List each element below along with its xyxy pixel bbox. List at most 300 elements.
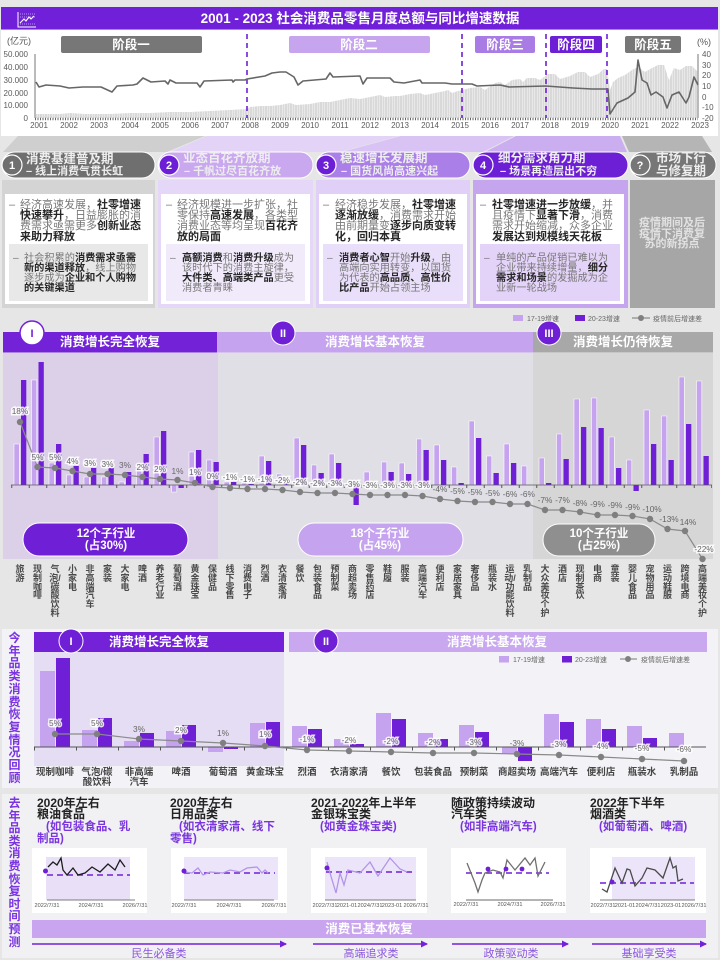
side heading: last year's forecast: 费: [8, 859, 20, 873]
year labels: 2007: [211, 121, 229, 130]
data labels: growth difference: -8%: [573, 498, 588, 508]
left axis labels: [4, 50, 29, 123]
pill: 12 sub-industries: 12个子行业: [77, 526, 135, 540]
vertical category labels: 婴: [628, 564, 637, 574]
vertical category labels: 众: [540, 573, 550, 583]
arrows and category labels: 政策驱动类: [484, 946, 538, 960]
category labels: 衣清家清: [330, 766, 368, 778]
data labels: growth difference: -22%: [694, 544, 714, 554]
stage 2 text card: 消费业态等均呈现百花齐: [177, 218, 298, 232]
right axis unit: (%): [697, 37, 711, 47]
data labels: growth difference: -3%: [398, 480, 413, 490]
stage 3 text card: 高端向实用转变，以国货: [339, 261, 451, 274]
vertical category labels: 餐: [295, 564, 304, 574]
right axis labels: -10: [702, 103, 714, 112]
side heading: last year's forecast: 测: [8, 935, 20, 949]
mini chart 5: 2026/7/31: [682, 903, 706, 909]
stage 1 text card: [5, 194, 153, 304]
stage 1 text card: –: [13, 253, 19, 264]
data labels: growth difference: 0%: [206, 471, 219, 481]
vertical category labels: 动: [663, 573, 672, 583]
vertical category labels: 场: [348, 590, 357, 600]
category labels: 烈酒: [297, 766, 317, 778]
data labels: -3%: [552, 739, 567, 749]
side heading: this year's review: 回: [8, 758, 20, 772]
vertical category labels: 家: [278, 582, 287, 592]
vertical category labels: 黄: [190, 564, 200, 574]
vertical category labels: 酸: [50, 590, 60, 600]
stage 4 pill: 4: [480, 160, 487, 172]
vertical category labels: 品: [645, 590, 654, 600]
stage badges: 阶段二: [340, 37, 378, 52]
data labels: -3%: [510, 738, 525, 748]
vertical category labels: 行: [155, 582, 164, 592]
data labels: 3%: [133, 724, 146, 734]
data labels: -2%: [426, 737, 441, 747]
side heading: this year's review: 年: [8, 644, 20, 658]
vertical category labels: 车: [85, 599, 94, 609]
vertical category labels: 清: [278, 573, 287, 583]
vertical category labels: 护: [540, 608, 550, 618]
section header III: [533, 321, 713, 352]
data labels: growth difference: 4%: [66, 456, 79, 466]
left axis labels: 10.000: [4, 101, 29, 110]
stage 3 text card: 比产品开始占领主场: [339, 281, 431, 294]
vertical category labels: 料: [50, 608, 60, 618]
vertical category labels: 商: [593, 573, 602, 583]
data labels: growth difference: 14%: [680, 517, 697, 527]
category labels: 汽车: [129, 776, 149, 788]
side heading: last year's forecast: 预: [8, 922, 20, 936]
year labels: 2022: [661, 121, 679, 130]
stage 3 pill: 3: [323, 160, 329, 172]
stage 2 text card: 经济规模进一步扩张，社: [177, 197, 298, 211]
group 3 heading: (如黄金珠宝类): [320, 819, 397, 833]
vertical category labels: 店: [365, 590, 374, 600]
side heading: this year's review: 今: [8, 631, 20, 645]
data labels: growth difference: -2%: [310, 478, 325, 488]
group 1 heading: [37, 795, 131, 845]
arrows and category labels: 民生必备类: [132, 946, 186, 960]
category labels: 非高端: [125, 766, 154, 778]
pill: 12 sub-industries: [23, 523, 188, 556]
header II: 消费增长基本恢复: [447, 634, 547, 649]
vertical category labels: 装: [488, 573, 497, 583]
vertical category labels: 装: [400, 573, 410, 583]
vertical category labels: 家: [103, 564, 112, 574]
vertical category labels: 端: [85, 582, 94, 592]
stage 2 text card: 该时代下的消费主旋律，: [182, 261, 294, 274]
vertical category labels: 境: [680, 573, 690, 583]
stage 5 text: [639, 215, 705, 250]
stage 1 text card: 来助力释放: [20, 229, 75, 243]
year labels: 2019: [571, 121, 589, 130]
stage 4 pill: [473, 150, 628, 178]
mini chart 1: [32, 848, 147, 913]
data labels: growth difference: 2%: [154, 464, 167, 474]
stage connector wedges: [3, 136, 712, 152]
data labels: growth difference: 5%: [32, 452, 44, 462]
data labels: 5%: [49, 718, 62, 728]
pill: 18 sub-industries: [298, 523, 463, 556]
stage 1 pill: 1: [9, 160, 15, 172]
stage dividers: [247, 34, 607, 118]
vertical category labels: 品: [208, 582, 217, 592]
stage 1 pill: 消费基建普及期: [26, 151, 114, 166]
legend: 疫情前后增速差: [641, 655, 690, 664]
mini chart 5: 2022/7/31: [591, 903, 615, 909]
vertical category labels: 零: [225, 582, 234, 592]
legend: industry chart: 20-23增速: [588, 314, 620, 323]
stage 2 pill: [158, 150, 313, 178]
mini chart 4: [451, 848, 566, 913]
group 3 heading: 2021-2022年上半年: [311, 795, 416, 810]
vertical category labels: 售: [365, 573, 374, 583]
mini chart 3: 2022/7/31: [313, 903, 337, 909]
group 1 heading: (如包装食品、乳: [46, 819, 131, 833]
stage 2 text card: 零保持高速发展，各类型: [177, 208, 298, 222]
year labels: 2009: [271, 121, 289, 130]
vertical category labels: 童: [610, 564, 620, 574]
mini chart 5: 2023-01: [661, 903, 681, 909]
vertical category labels: 鞋: [383, 564, 392, 574]
vertical category labels: 制: [33, 573, 42, 583]
arrows and category labels: 高端追求类: [344, 946, 398, 960]
vertical category labels: 食: [313, 582, 322, 592]
bar chart: 20-23 growth by industry: [21, 362, 709, 505]
year labels: 2004: [121, 121, 139, 130]
left axis labels: 40.000: [4, 63, 29, 72]
vertical category labels: 售: [225, 590, 234, 600]
group 5 heading: 2022年下半年: [590, 795, 665, 810]
vertical category labels: 养: [155, 564, 164, 574]
vertical category labels: 运: [505, 564, 514, 574]
section header I: 消费增长完全恢复: [60, 334, 160, 349]
year labels: 2021: [631, 121, 649, 130]
pill: 10 sub-industries: (占25%): [578, 538, 620, 552]
mini chart 3: 2023-01: [382, 903, 402, 909]
vertical category labels: 啤: [138, 564, 147, 574]
axes: [35, 54, 698, 118]
vertical category labels: 消: [243, 564, 252, 574]
year labels: 2013: [391, 121, 409, 130]
data labels: 1%: [259, 729, 272, 739]
category labels: 黄金珠宝: [246, 766, 284, 778]
section header II: II: [280, 328, 286, 340]
vertical category labels: 服: [400, 564, 410, 574]
group 1 heading: 2020年左右: [37, 795, 100, 810]
stage 5 text: 疫情期间及后: [639, 215, 705, 229]
data labels: growth difference: 3%: [102, 459, 114, 469]
stage 3 text card: 经济稳步发展，社零增速: [335, 197, 456, 211]
side heading: last year's forecast: 间: [8, 909, 20, 923]
group 5 heading: [590, 795, 687, 833]
stage 4 pill: 细分需求角力期: [498, 150, 586, 165]
group 4 heading: 随政策持续波动: [451, 795, 535, 810]
vertical category labels: 费: [243, 573, 252, 583]
mini chart 1: 2022/7/31: [35, 903, 59, 909]
section header I: I: [30, 328, 34, 340]
panel: stage 4: [473, 150, 628, 308]
side heading: this year's review: 费: [8, 695, 20, 709]
panel: monthly retail sales chart: [1, 30, 718, 136]
side heading: this year's review: 顾: [8, 771, 20, 785]
vertical category labels: 高: [698, 564, 707, 574]
vertical category labels: 饮: [505, 599, 514, 609]
vertical category labels: 装: [313, 573, 322, 583]
stage 4 text card: 社零增速进一步放缓，并: [492, 197, 613, 211]
panel: last year's forecast: [2, 794, 718, 960]
mini chart 4: 2024/7/31: [498, 902, 522, 908]
stage 1 text card: 经济高速发展，社零增速: [20, 197, 141, 211]
side heading: this year's review: 复: [8, 720, 20, 734]
year labels: 2006: [181, 121, 199, 130]
stage 1 text card: 的关键渠道: [24, 281, 75, 294]
side heading: last year's forecast: [8, 796, 20, 949]
panel: stage 3: [316, 150, 470, 308]
vertical category labels: 装: [610, 573, 620, 583]
data labels: growth difference: -1%: [223, 472, 238, 482]
vertical category labels: 酒: [138, 573, 147, 583]
stage 2 pill: – 千帆过尽百花齐放: [184, 164, 281, 178]
vertical category labels: 料: [505, 608, 514, 618]
side heading: last year's forecast: 恢: [8, 872, 20, 886]
vertical category labels: 汽: [85, 590, 94, 600]
data labels: growth difference: 3%: [84, 458, 97, 468]
stage 3 pill: [316, 150, 470, 178]
legend: industry chart: 疫情前后增速差: [653, 314, 702, 323]
vertical category labels: 高: [418, 564, 427, 574]
vertical category labels: 履: [383, 573, 392, 583]
vertical category labels: 奢: [470, 564, 480, 574]
vertical category labels: 家: [120, 573, 130, 583]
mini chart 3: [311, 848, 428, 913]
vertical category labels: 啡: [33, 590, 42, 600]
data labels: 1%: [217, 728, 230, 738]
vertical category labels: 药: [365, 582, 374, 592]
vertical category labels: 游: [15, 573, 24, 583]
mini chart 2: 2022/7/31: [172, 903, 196, 909]
mini chart 3: 2024/7/31: [358, 903, 382, 909]
vertical category labels: 现: [575, 564, 584, 574]
year labels: 2015: [451, 121, 469, 130]
stage 3 text card: 化，回归本真: [335, 229, 401, 243]
vertical category labels: 制: [330, 573, 340, 583]
side heading: this year's review: 情: [8, 733, 20, 747]
data labels: 5%: [91, 718, 104, 728]
stage badges: 阶段五: [634, 37, 672, 52]
vertical category labels: 瓶: [488, 564, 497, 574]
stage 3 pill: 稳速增长发展期: [340, 150, 428, 165]
right axis labels: 40: [702, 50, 711, 59]
mini chart 5: [590, 848, 706, 913]
icon: line chart: [18, 12, 36, 27]
YoY growth line: [36, 60, 698, 114]
year labels: 2023: [691, 121, 709, 130]
right axis labels: 30: [702, 61, 711, 70]
data labels: growth difference: -3%: [380, 480, 395, 490]
vertical category labels: 酒: [260, 573, 270, 583]
vertical category labels: 保: [208, 564, 217, 574]
vertical category labels: 乳: [523, 564, 532, 574]
vertical category labels: 店: [558, 573, 567, 583]
vertical category labels: 酒: [173, 582, 182, 592]
stage 3 text card: [319, 194, 467, 304]
header II: [289, 629, 707, 653]
stage 3 text card: 为代表的高品质、高性价: [339, 271, 451, 284]
group 5 heading: (如葡萄酒、啤酒): [599, 819, 687, 833]
vertical category labels: 动/: [504, 573, 516, 583]
vertical category labels: 商: [348, 564, 357, 574]
mini chart 2: 2024/7/31: [217, 903, 241, 909]
vertical category labels: 酒: [558, 564, 567, 574]
stage badges: 阶段三: [486, 37, 524, 52]
vertical category labels: 健: [208, 573, 217, 583]
vertical category labels: 鞋: [663, 582, 672, 592]
bar chart: 17-19 growth by industry: [14, 377, 702, 492]
category labels: 包装食品: [414, 766, 452, 778]
year labels: 2010: [301, 121, 319, 130]
mini chart 5: 2021-01: [615, 903, 635, 909]
section header II: [217, 321, 533, 352]
stage 2 pill: 2: [166, 160, 172, 172]
right axis labels: 20: [702, 71, 711, 80]
data labels: -1%: [300, 734, 315, 744]
stage 2 text card: –: [166, 199, 173, 211]
data labels: 2%: [175, 725, 188, 735]
group 4 heading: [451, 795, 537, 833]
side heading: last year's forecast: 消: [8, 846, 20, 860]
vertical category labels: 功: [505, 582, 514, 592]
year labels: 2003: [90, 121, 108, 130]
vertical category labels: 具: [453, 590, 462, 600]
vertical category labels: 高: [85, 573, 94, 583]
side heading: this year's review: [8, 631, 20, 785]
stage 3 text card: 由前期量变逐步向质变转: [335, 218, 456, 232]
data labels: growth difference: -3%: [345, 479, 360, 489]
stage 3 text card: –: [327, 253, 333, 264]
stage 4 text card: 且疫情下显著下滑，消费: [492, 208, 613, 222]
mini chart 4: 2022/7/31: [454, 902, 478, 908]
vertical category labels: 烈: [260, 564, 270, 574]
stage 4 text card: –: [480, 199, 487, 211]
pill: 10 sub-industries: 10个子行业: [570, 526, 628, 540]
vertical category labels: 物: [645, 573, 654, 583]
bar chart: 17-19 growth: [40, 671, 684, 754]
group 3 heading: [311, 795, 416, 833]
line: growth difference: [20, 422, 702, 559]
bar chart: 20-23 growth: [56, 658, 657, 761]
vertical category labels: 家: [68, 573, 77, 583]
data labels: growth difference: 3%: [119, 460, 132, 470]
mini chart 5: 2024/7/31: [636, 903, 660, 909]
legend: industry chart: [513, 314, 702, 323]
banner: basically recovered: 消费已基本恢复: [325, 921, 413, 936]
right axis labels: 10: [702, 82, 711, 91]
group 2 heading: 零售): [170, 831, 197, 845]
vertical category labels: 电: [68, 582, 77, 592]
data labels: growth difference: -1%: [258, 474, 273, 484]
stage 4 text card: 单纯的产品促销已难以为: [496, 251, 608, 264]
vertical category labels: 食: [628, 582, 637, 592]
stage 3 text card: –: [323, 199, 330, 211]
vertical category labels: 装: [103, 573, 112, 583]
vertical category labels: 美: [698, 582, 707, 592]
vertical category labels: 利: [435, 573, 444, 583]
vertical category labels: 跨: [680, 564, 690, 574]
data labels: growth difference: -3%: [328, 478, 343, 488]
vertical category labels: 零: [365, 564, 374, 574]
header II: II: [323, 636, 329, 648]
vertical category labels: 咖: [33, 582, 42, 592]
vertical category labels: 便: [435, 564, 444, 574]
vertical category labels: 超: [348, 573, 357, 583]
group 1 heading: 制品): [37, 832, 64, 845]
vertical category labels: 水: [488, 582, 497, 592]
category labels: 餐饮: [381, 766, 401, 778]
vertical category labels: 制: [523, 573, 532, 583]
header I: [34, 629, 284, 653]
stage 1 text card: 快速攀升，日益膨胀的消: [20, 208, 141, 222]
vertical category labels: 家: [453, 582, 462, 592]
data labels: growth difference: 1%: [172, 466, 184, 476]
data labels: growth difference: -5%: [450, 486, 465, 496]
mini chart 1: 2026/7/31: [123, 903, 147, 909]
banner: basically recovered: [32, 920, 706, 938]
panel: this year's review: [2, 629, 718, 788]
data labels: growth difference: -13%: [659, 514, 679, 524]
stage 4 text card: 发展达到规模线天花板: [492, 229, 602, 243]
stage 3 text card: 逐渐放缓，消费需求开始: [335, 208, 456, 222]
group 1 heading: 粮油食品: [37, 806, 85, 821]
vertical category labels: 子: [243, 590, 252, 600]
vertical category labels: 现: [33, 564, 42, 574]
vertical category labels: 商: [680, 590, 690, 600]
arrows and category labels: 基础享受类: [622, 946, 676, 960]
group 2 heading: (如衣清家清、线下: [179, 819, 275, 833]
vertical category labels: 下: [225, 573, 234, 583]
group 3 heading: 金银珠宝类: [311, 806, 371, 821]
data labels: growth difference: -1%: [240, 474, 255, 484]
vertical category labels: 包: [313, 564, 322, 574]
left axis unit: (亿元): [7, 35, 31, 46]
data labels: growth difference: -3%: [363, 480, 378, 490]
data labels: -3%: [467, 737, 482, 747]
pill: 18 sub-industries: 18个子行业: [351, 526, 409, 540]
data labels: growth difference: -9%: [608, 500, 623, 510]
vertical category labels: 妆: [698, 590, 707, 600]
vertical category labels: 端: [698, 573, 707, 583]
group 2 heading: 日用品类: [170, 806, 218, 821]
stage 5 pill: ?: [637, 160, 644, 172]
right axis labels: -20: [702, 114, 714, 123]
group 4 heading: 汽车类: [451, 806, 487, 821]
vertical category labels: 金: [190, 573, 200, 583]
panel: stage 2: [158, 150, 313, 308]
data labels: growth difference: 2%: [136, 462, 149, 472]
stage 1 text card: 费需求亟需更多创新业态: [20, 218, 141, 232]
vertical category labels: 个: [698, 599, 707, 609]
data labels: -6%: [677, 744, 692, 754]
group 2 heading: [170, 795, 275, 845]
vertical category labels: 碳: [50, 582, 60, 592]
axis baseline: [34, 747, 706, 749]
legend: industry chart: 17-19增速: [527, 314, 559, 323]
vertical category labels: 护: [698, 608, 707, 618]
vertical category labels: 珠: [190, 582, 200, 592]
stage 2 text card: 大件类、高端类产品更受: [182, 271, 294, 284]
section header II: 消费增长基本恢复: [325, 334, 425, 349]
